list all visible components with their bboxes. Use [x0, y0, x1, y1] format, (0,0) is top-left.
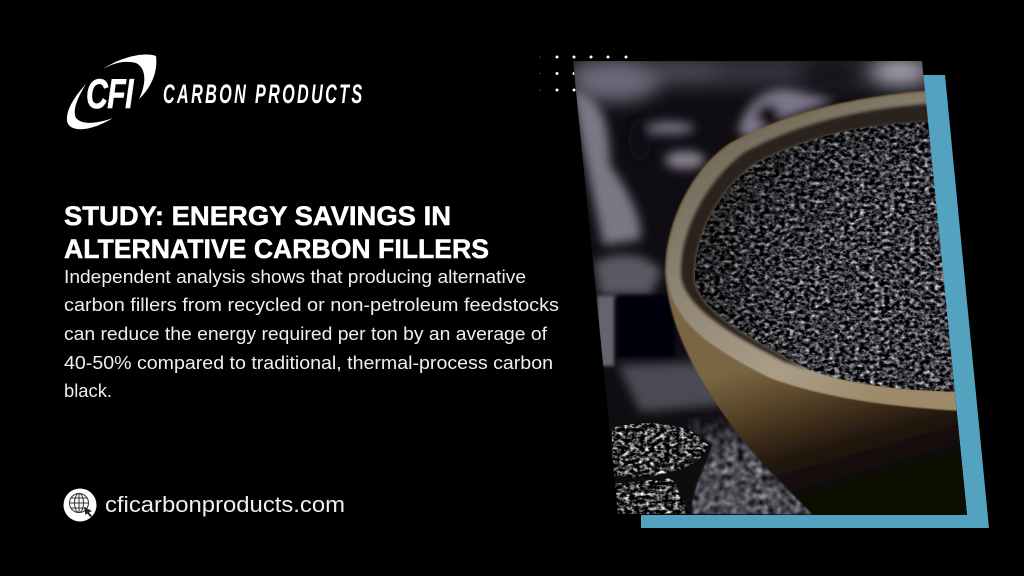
- bowl inner shadow: [678, 102, 928, 371]
- heading: STUDY: ENERGY SAVINGS IN: [64, 201, 451, 231]
- bowl outer body: [665, 88, 980, 520]
- logo: CFI Carbon Products: [67, 55, 362, 129]
- body text: [64, 266, 559, 401]
- body text: can reduce the energy required per ton by an average of: [64, 323, 548, 344]
- photo: bowl of carbon: [570, 55, 980, 520]
- heading: [64, 201, 489, 264]
- icon: globe with cursor: [64, 488, 96, 522]
- carbon filler texture: [694, 122, 955, 392]
- logo wordmark: CARBON PRODUCTS: [163, 79, 362, 109]
- decorative dots: [539, 56, 628, 92]
- website address: cficarbonproducts.com: [105, 492, 345, 517]
- bowl rim band: [667, 90, 980, 412]
- body text: carbon fillers from recycled or non-petroleum feedstocks: [64, 294, 559, 315]
- foreground coal chunks: [597, 295, 828, 520]
- logo swoosh: [67, 55, 156, 129]
- body text: Independent analysis shows that producing alternative: [64, 266, 526, 287]
- body text: black.: [64, 380, 112, 401]
- teal offset frame: [641, 75, 989, 528]
- logo letters CFI: CFI: [86, 70, 134, 117]
- website link: [64, 488, 345, 522]
- heading: ALTERNATIVE CARBON FILLERS: [64, 234, 489, 264]
- body text: 40-50% compared to traditional, thermal-process carbon: [64, 352, 553, 373]
- blurred background coals: [570, 55, 970, 102]
